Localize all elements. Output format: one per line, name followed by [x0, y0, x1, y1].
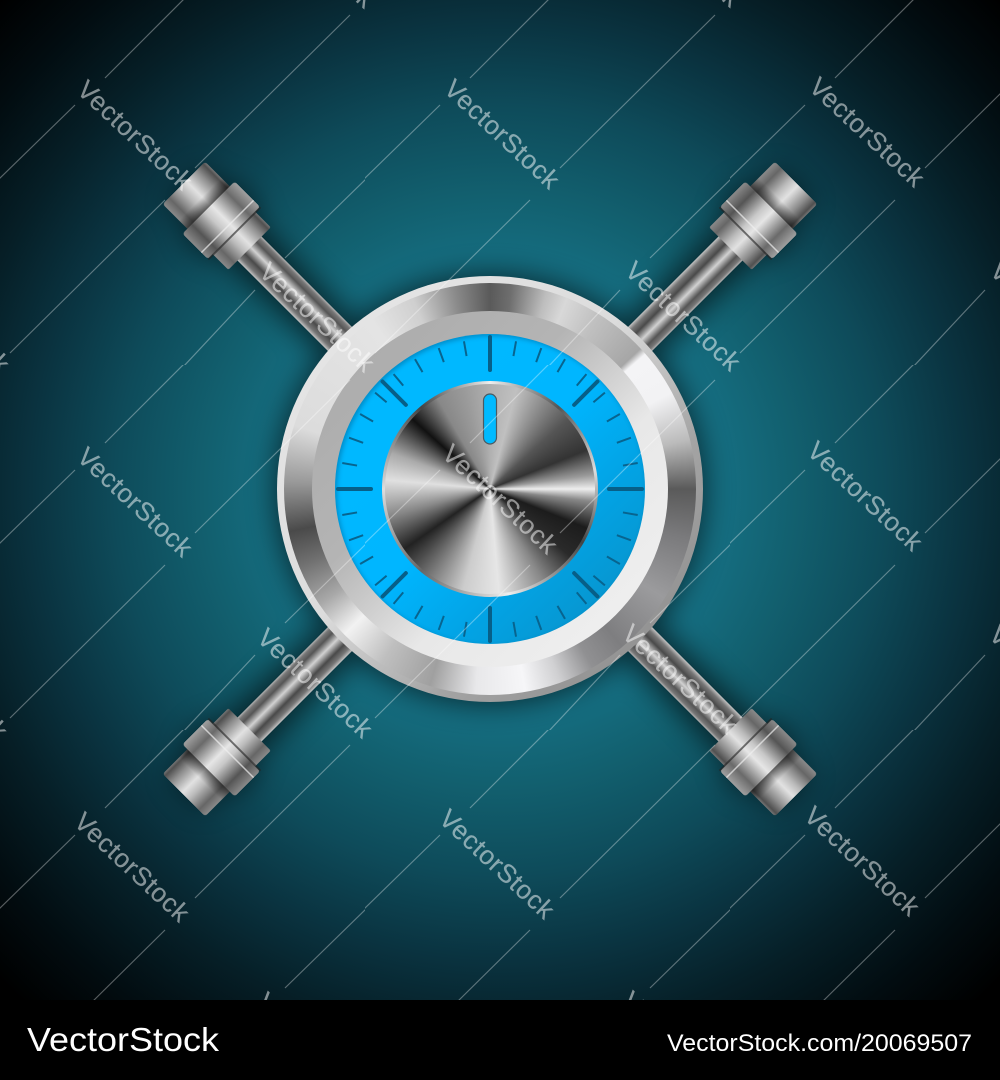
brushed metal knob [385, 384, 595, 594]
watermark labels: VectorStock [616, 618, 744, 740]
watermark labels: VectorStock [251, 622, 379, 744]
arm: lower right [584, 583, 822, 821]
outer rim [277, 276, 703, 702]
watermark labels: VectorStock [798, 800, 926, 922]
watermark labels: VectorStock [253, 256, 381, 378]
inner light ring [312, 311, 668, 667]
blue scale ring [335, 334, 645, 644]
scale ticks [336, 335, 644, 643]
watermark labels: VectorStock [436, 438, 564, 560]
footer brand: VectorStock [27, 1021, 220, 1058]
watermark labels: VectorStock [803, 71, 931, 193]
bevelled metal ring [284, 283, 696, 695]
watermark labels: VectorStock [71, 441, 199, 563]
drop shadow under the mechanism [160, 159, 820, 819]
watermark labels: VectorStock [619, 255, 747, 377]
footer bar with brand and image id [0, 1000, 1000, 1080]
arm: upper right [584, 157, 822, 395]
arm: lower left [158, 583, 396, 821]
arm: upper left [158, 157, 396, 395]
watermark labels: VectorStock [438, 73, 566, 195]
watermark labels: VectorStock [801, 435, 929, 557]
footer image id: VectorStock.com/20069507 [667, 1030, 972, 1057]
watermark labels: VectorStock [71, 74, 199, 196]
knob edge [382, 381, 598, 597]
watermark labels: VectorStock [68, 806, 196, 928]
watermark labels: VectorStock [433, 803, 561, 925]
dial: metal bezel, blue scale and knob [277, 276, 703, 702]
knob pointer [482, 393, 498, 445]
